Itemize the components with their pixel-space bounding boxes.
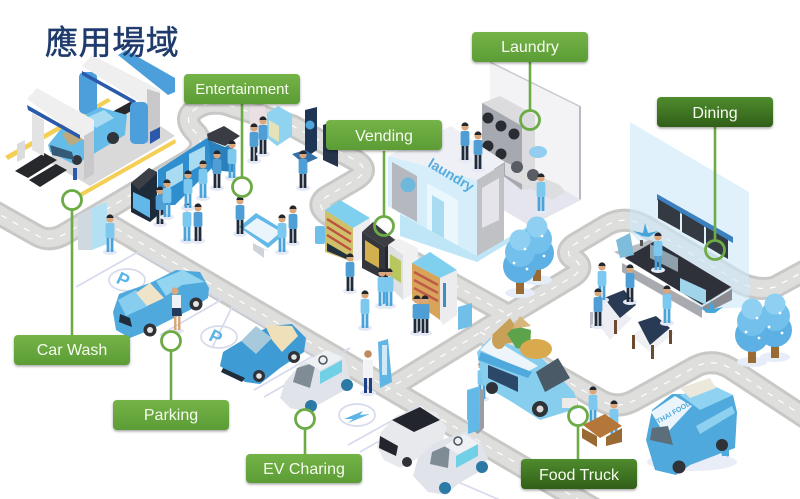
parking bays: P	[206, 325, 226, 349]
food van: THAI FOOD	[656, 400, 692, 426]
title: 應用場域	[45, 24, 179, 61]
car wash	[5, 50, 176, 197]
car wash payment kiosks	[78, 202, 107, 250]
parking meter	[468, 388, 480, 434]
blue convertible	[220, 324, 306, 384]
EV car 2 with charger	[413, 386, 488, 495]
callout: Entertainment: Entertainment	[195, 81, 290, 98]
laundry storefront: laundry	[425, 155, 477, 195]
dining tables and chairs	[590, 290, 675, 359]
callout: EV Charing: EV Charing	[263, 461, 345, 478]
callout: Laundry	[472, 32, 588, 130]
roads	[0, 103, 800, 499]
callout: Dining: Dining	[692, 105, 738, 122]
callout: Parking	[113, 332, 229, 430]
picnic table	[582, 414, 622, 447]
trees	[503, 216, 792, 367]
callout: Entertainment	[184, 74, 300, 196]
callout: Food Truck	[521, 406, 637, 489]
food van	[646, 378, 737, 475]
people	[103, 116, 732, 462]
food truck	[477, 316, 579, 420]
vending machines	[315, 200, 472, 330]
dining glass backdrop	[630, 122, 749, 310]
callout: Parking: Parking	[144, 407, 198, 424]
callout: Vending	[326, 120, 442, 236]
arcade machines	[131, 126, 240, 222]
callout: Vending: Vending	[355, 128, 413, 145]
entertainment zone: claw machines, dart machine, air hockey	[239, 105, 338, 258]
blue sedan and standing woman	[113, 270, 209, 338]
dining bar and menu boards	[614, 194, 733, 318]
callout: Food Truck: Food Truck	[539, 467, 620, 484]
parking bays: P	[113, 268, 133, 291]
callout: EV Charing	[246, 410, 362, 483]
black car	[377, 407, 447, 468]
parking bays	[76, 252, 500, 499]
callout: Car Wash: Car Wash	[37, 342, 107, 359]
callout: Laundry: Laundry	[501, 39, 559, 56]
callout: Dining	[657, 97, 773, 260]
laundry storefront	[388, 126, 535, 262]
callout: Car Wash	[14, 190, 130, 365]
EV car 1 with charger	[280, 339, 392, 412]
laundry room	[445, 62, 581, 226]
